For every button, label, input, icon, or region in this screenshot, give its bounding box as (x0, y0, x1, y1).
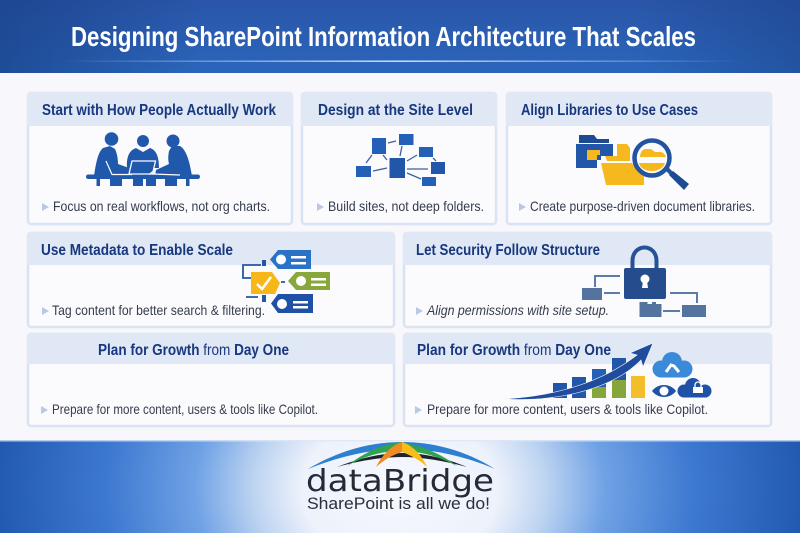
icon: growth chart with arrow and clouds (503, 343, 712, 400)
body text: Prepare for more content, users & tools like Copilot. (427, 401, 708, 417)
bullet (42, 203, 49, 211)
panel: align libraries (506, 92, 772, 224)
footer banner (0, 440, 800, 533)
bullet (42, 307, 49, 315)
body text: Focus on real workflows, not org charts. (53, 198, 270, 214)
heading: Align Libraries to Use Cases (521, 102, 698, 119)
icon: people meeting at a table (86, 132, 200, 186)
logo tagline: SharePoint is all we do! (307, 494, 490, 513)
logo arch (308, 442, 495, 469)
bullet (415, 406, 422, 414)
heading: Design at the Site Level (318, 102, 473, 119)
header banner (0, 0, 800, 73)
logo: databridge (306, 442, 495, 513)
body text: Create purpose-driven document libraries. (530, 198, 755, 214)
body text: Prepare for more content, users & tools like Copilot. (52, 401, 318, 417)
heading: Let Security Follow Structure (416, 242, 600, 259)
panel: let security follow structure (403, 232, 772, 327)
panel: start with how people work (27, 92, 293, 224)
icon: metadata tags (243, 250, 330, 313)
icon: padlock with folders (582, 248, 706, 317)
heading: Plan for Growth from Day One (417, 342, 611, 359)
bullet (519, 203, 526, 211)
icon: folders and magnifier (576, 135, 689, 190)
bullet (41, 406, 48, 414)
panel: design at the site level (301, 92, 497, 224)
panel: use metadata (27, 232, 395, 327)
heading: Plan for Growth from Day One (98, 342, 289, 359)
heading: Use Metadata to Enable Scale (41, 242, 233, 259)
icon: site network (356, 134, 445, 186)
body text: Build sites, not deep folders. (328, 198, 484, 214)
body text: Tag content for better search & filtering. (52, 302, 265, 318)
panel: plan for growth left (27, 333, 395, 426)
panel: plan for growth right (403, 333, 772, 426)
body text: Align permissions with site setup. (426, 302, 609, 318)
bullet (416, 307, 423, 315)
heading: Start with How People Actually Work (42, 102, 276, 119)
bullet (317, 203, 324, 211)
logo wordmark: dataBridge (306, 464, 494, 499)
